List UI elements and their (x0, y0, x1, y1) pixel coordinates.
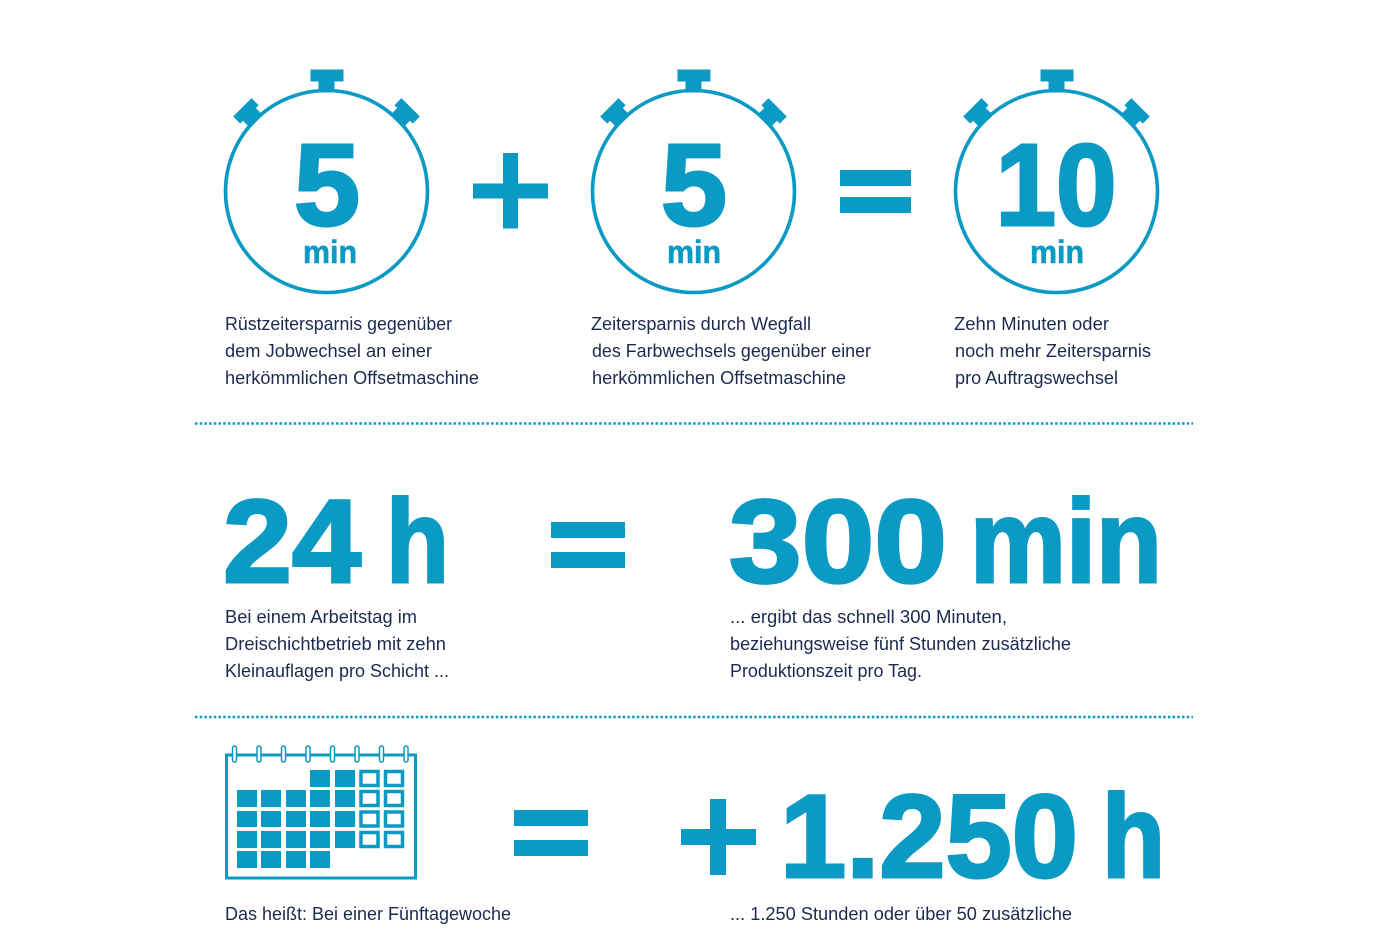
stopwatch: 5 min setup (226, 70, 428, 292)
panel: yearly gain (225, 746, 1165, 924)
big figure: 300 min: 300 (729, 476, 947, 608)
caption: total saving: noch mehr Zeitersparnis (955, 341, 1151, 361)
icon: equals (514, 810, 588, 856)
caption: ink change saving: herkömmlichen Offsetmaschine (592, 368, 846, 388)
icon: calendar (226, 746, 416, 878)
caption: setup time saving (225, 314, 479, 388)
caption: result per year: ... 1.250 Stunden oder über 50 zusätzliche (730, 904, 1072, 924)
caption: setup time saving: dem Jobwechsel an einer (225, 341, 432, 361)
caption: working day: Bei einem Arbeitstag im (225, 607, 417, 627)
caption: result per day: Produktionszeit pro Tag. (730, 661, 922, 681)
icon: equals (840, 170, 911, 213)
caption: setup time saving: herkömmlichen Offsetmaschine (225, 368, 479, 388)
caption: working day: Kleinauflagen pro Schicht ... (225, 661, 449, 681)
caption: result per day (730, 607, 1071, 681)
caption: total saving: Zehn Minuten oder (954, 314, 1109, 334)
big figure: 300 min (729, 476, 1162, 608)
caption: result per day: beziehungsweise fünf Stunden zusätzliche (730, 634, 1071, 654)
caption: ink change saving (591, 314, 871, 388)
stopwatch: 5 min ink change: 5 (661, 120, 727, 250)
stopwatch: 5 min setup: min (303, 234, 357, 270)
big figure: 24 h (223, 476, 449, 608)
caption: working day (225, 607, 449, 681)
caption: result per day: ... ergibt das schnell 300 Minuten, (730, 607, 1007, 627)
big figure: 24 h: 24 (223, 476, 361, 608)
icon: equals (551, 522, 625, 568)
caption: working day: Dreischichtbetrieb mit zehn (225, 634, 446, 654)
caption: total saving: pro Auftragswechsel (955, 368, 1118, 388)
caption: five day week: Das heißt: Bei einer Fünftagewoche (225, 904, 511, 924)
big figure: +1.250 h: 1.250 (780, 771, 1078, 903)
stopwatch: 10 min total: min (1030, 234, 1084, 270)
big figure: +1.250 h: h (1102, 771, 1165, 903)
panel: daily gain (223, 476, 1162, 681)
stopwatch: 5 min setup: 5 (294, 120, 360, 250)
big figure: 24 h: h (386, 476, 449, 608)
caption: setup time saving: Rüstzeitersparnis gegenüber (225, 314, 452, 334)
stopwatch: 10 min total (956, 70, 1158, 292)
caption: total saving (954, 314, 1151, 388)
big figure: 300 min: min (970, 476, 1162, 608)
caption: ink change saving: des Farbwechsels gegenüber einer (592, 341, 871, 361)
caption: ink change saving: Zeitersparnis durch Wegfall (591, 314, 811, 334)
stopwatch: 5 min ink change (592, 70, 794, 292)
panel: time saving per job change (225, 70, 1158, 388)
stopwatch: 10 min total: 10 (996, 120, 1116, 250)
big figure: +1.250 h (681, 771, 1165, 903)
icon: plus (473, 153, 548, 228)
stopwatch: 5 min ink change: min (667, 234, 721, 270)
